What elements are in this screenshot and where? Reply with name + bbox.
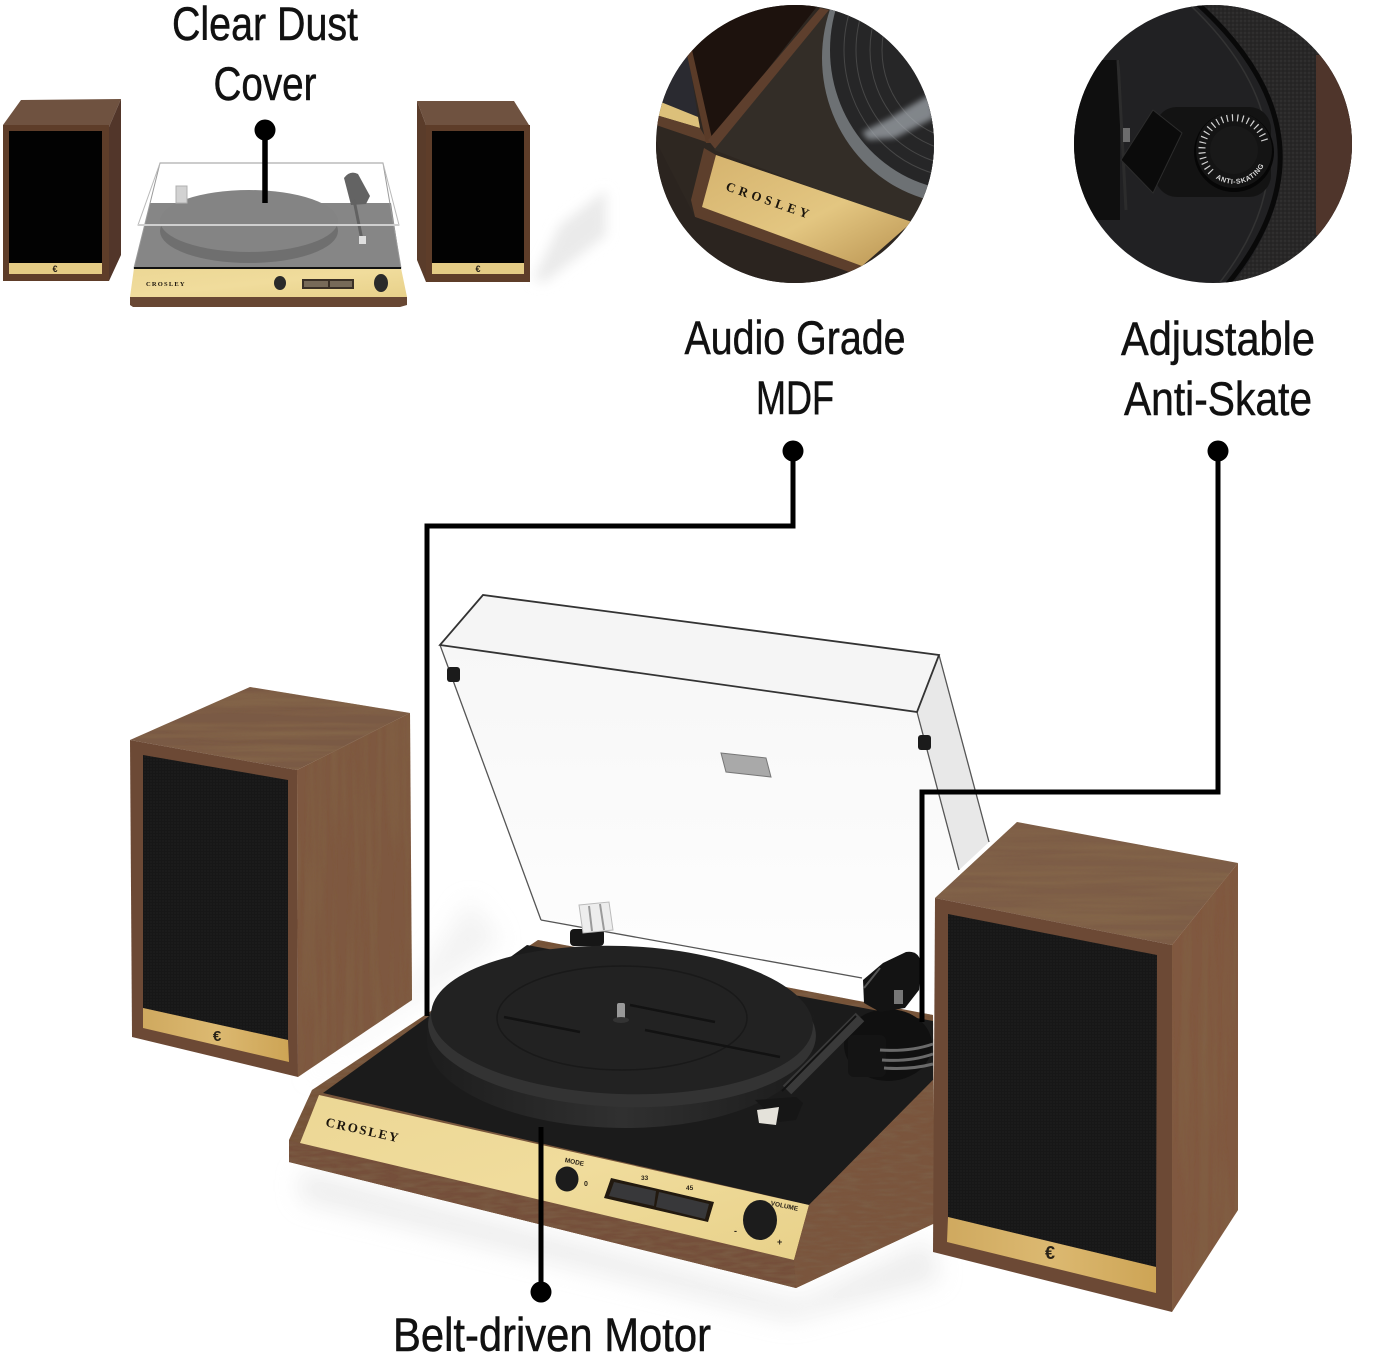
leader line: audio grade MDF [427, 451, 793, 1016]
mode knob: 0 [584, 1181, 588, 1188]
callout: audio grade MDF: MDF [756, 371, 834, 424]
turntable [289, 902, 935, 1288]
anti-skate dial: ANTI-SKATING [1216, 164, 1264, 184]
cover label [721, 753, 771, 777]
spindle [613, 1003, 629, 1023]
speaker grille [143, 755, 288, 1040]
callout: adjustable anti-skate [1121, 312, 1315, 462]
plinth black deck [323, 945, 933, 1205]
circle detail: anti-skate dial [1074, 5, 1352, 283]
volume knob: - [734, 1226, 737, 1236]
callout: adjustable anti-skate: Anti-Skate [1124, 372, 1312, 425]
counterweight [863, 952, 921, 1012]
small dust cover [134, 163, 401, 268]
anti-skate dial [1194, 114, 1274, 192]
circle detail: audio grade MDF: CROSLEY [724, 179, 815, 222]
mode knob: MODE [564, 1157, 585, 1168]
clear cartridge holder [579, 902, 613, 933]
gold front panel [300, 1095, 809, 1260]
callout: belt-driven motor: Belt-driven Motor [393, 1308, 711, 1361]
leader line: anti-skate [922, 451, 1218, 1022]
plinth wood [289, 940, 935, 1288]
circle detail: audio grade MDF [656, 5, 934, 283]
mode knob [556, 1157, 588, 1192]
gold front panel: CROSLEY [324, 1114, 400, 1145]
arm [787, 1017, 860, 1090]
callout: audio grade MDF: Audio Grade [684, 311, 906, 364]
small right speaker [417, 101, 530, 282]
speaker grille [948, 914, 1157, 1267]
floor shadows [300, 900, 940, 1320]
speaker gold badge [947, 1217, 1156, 1293]
volume knob: + [777, 1237, 782, 1247]
wood bevel [794, 1080, 935, 1288]
small product photo: turntable with closed dust cover and speakers [3, 99, 606, 307]
right large speaker [933, 822, 1238, 1312]
callout: audio grade MDF [684, 311, 906, 462]
small turntable [130, 163, 407, 307]
callout: adjustable anti-skate: Adjustable [1121, 312, 1315, 365]
speed buttons [604, 1175, 714, 1222]
volume knob [734, 1200, 799, 1247]
speaker gold badge [143, 1008, 289, 1062]
cover bumpers [447, 667, 931, 750]
speaker gold badge: € [1045, 1243, 1055, 1263]
small left speaker: € [52, 264, 58, 274]
speed buttons: 45 [686, 1185, 694, 1192]
left large speaker [130, 687, 412, 1077]
raised clear dust cover [440, 595, 989, 992]
tonearm assembly [755, 952, 933, 1125]
callout: belt-driven motor [393, 1127, 711, 1361]
pivot base [844, 1009, 932, 1081]
headshell [755, 1097, 803, 1122]
rear hinge [570, 929, 604, 946]
platter [425, 939, 819, 1128]
small right speaker: € [475, 264, 481, 274]
volume knob: VOLUME [770, 1200, 799, 1213]
speed buttons: 33 [641, 1175, 649, 1182]
callout: clear dust cover [172, 0, 358, 203]
front wood strip [289, 1140, 796, 1288]
speaker gold badge: € [213, 1028, 222, 1045]
callout: clear dust cover: Cover [214, 57, 316, 110]
small turntable: CROSLEY [146, 281, 186, 288]
small left speaker [3, 99, 121, 281]
